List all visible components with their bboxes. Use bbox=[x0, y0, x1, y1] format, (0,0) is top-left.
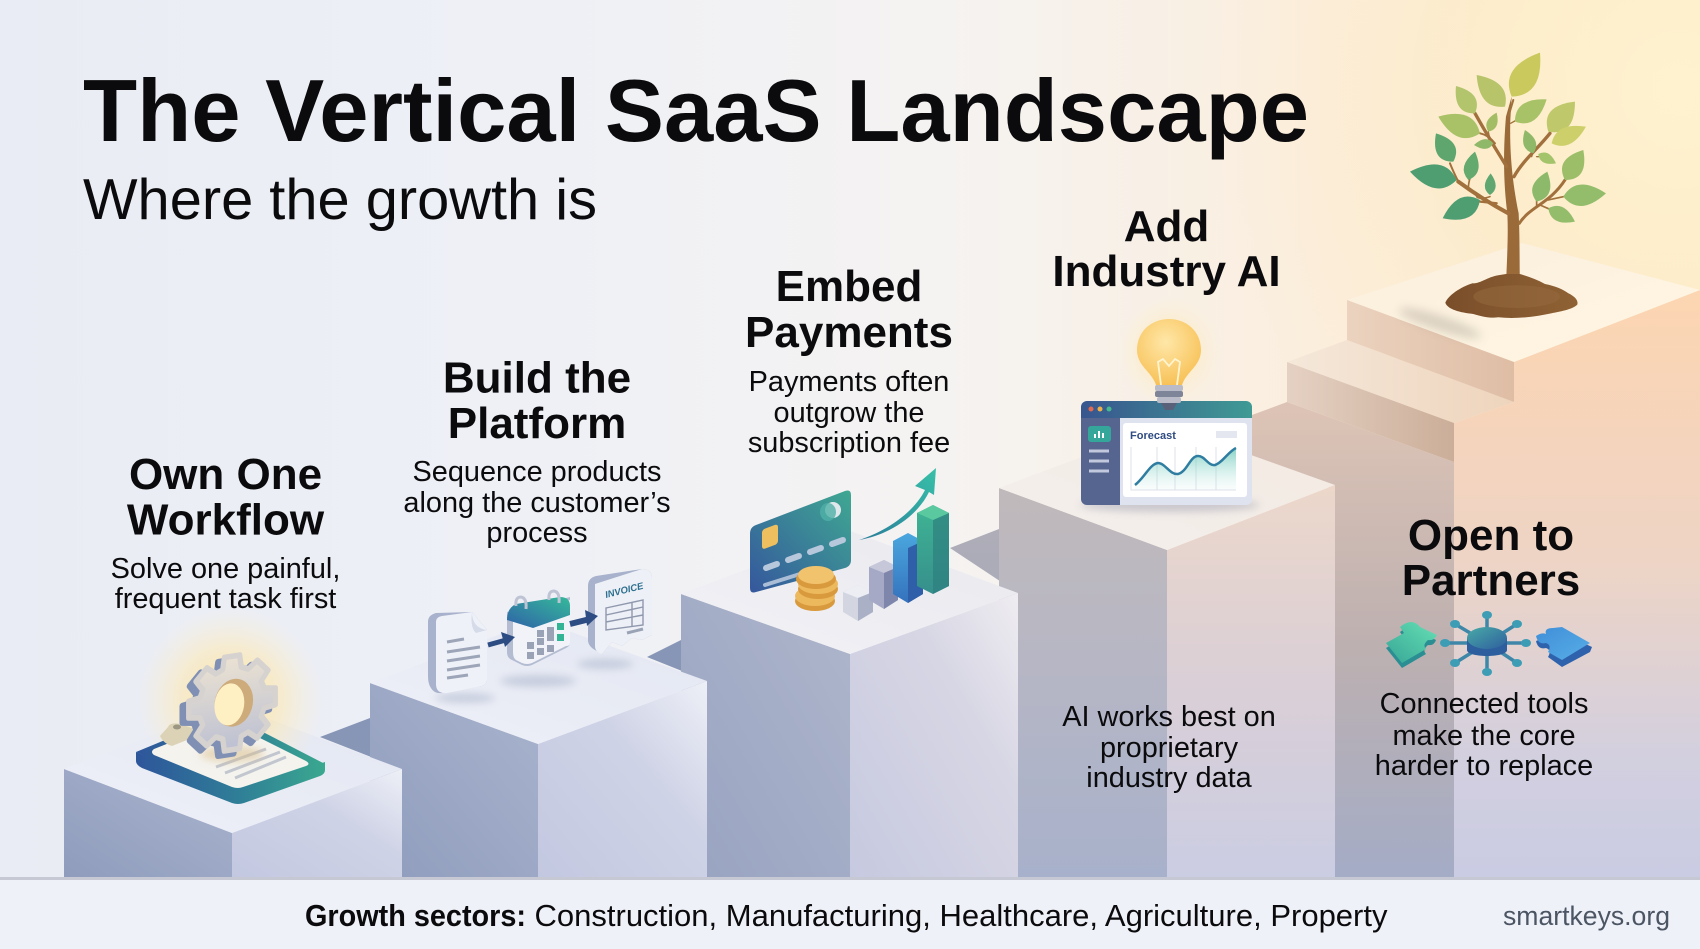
heading: build the platform bbox=[443, 354, 631, 448]
site credit: smartkeys.org bbox=[1503, 901, 1670, 931]
text: ai works best: industry data bbox=[1086, 762, 1253, 794]
text: connected tools: Connected tools bbox=[1380, 688, 1588, 720]
text: payments outgrow bbox=[748, 366, 950, 459]
heading: open to partners: Partners bbox=[1402, 556, 1580, 605]
text: sequence products: along the customer’s bbox=[403, 487, 671, 519]
text: payments outgrow: outgrow the bbox=[774, 397, 924, 429]
text: connected tools bbox=[1375, 688, 1593, 782]
text: sequence products: Sequence products bbox=[413, 456, 661, 488]
pedestal: step 2 bbox=[320, 620, 707, 877]
heading: build the platform: Build the bbox=[443, 354, 631, 402]
icon: puzzle pieces and hub bbox=[1386, 611, 1592, 676]
heading: add industry AI bbox=[1052, 202, 1281, 296]
growth sectors text: Growth sectors: bbox=[305, 898, 526, 933]
heading: embed payments: Embed bbox=[776, 262, 922, 311]
heading: embed payments: Payments bbox=[745, 308, 953, 357]
icon: lightbulb on forecast dashboard: Forecast bbox=[1130, 430, 1176, 442]
text: ai works best bbox=[1062, 701, 1276, 794]
icon: credit card coins and growth bars bbox=[750, 468, 949, 621]
footer bar bbox=[0, 877, 1700, 949]
heading: own one workflow: Own One bbox=[129, 450, 322, 499]
icon: growing tree bbox=[1397, 46, 1607, 344]
heading: own one workflow bbox=[127, 450, 325, 544]
heading: open to partners: Open to bbox=[1408, 511, 1574, 560]
heading: add industry AI: Industry AI bbox=[1052, 247, 1281, 296]
text: payments outgrow: Payments often bbox=[749, 366, 949, 398]
text: sequence products: process bbox=[486, 517, 588, 549]
panel: step 5 open to partners bbox=[1252, 46, 1700, 877]
text: ai works best: proprietary bbox=[1100, 732, 1239, 764]
text: connected tools: make the core bbox=[1392, 720, 1576, 752]
heading: add industry AI: Add bbox=[1124, 202, 1209, 251]
heading: build the platform: Platform bbox=[448, 399, 626, 448]
pedestal: step 4 bbox=[950, 425, 1335, 877]
text: solve one painful: frequent task first bbox=[115, 583, 336, 615]
heading: open to partners bbox=[1402, 511, 1580, 605]
title: The Vertical SaaS Landscape bbox=[83, 61, 1309, 160]
icon: document calendar invoice flow bbox=[428, 569, 652, 703]
panel: step 3 embed payments bbox=[647, 262, 1018, 877]
text: payments outgrow: subscription fee bbox=[748, 427, 950, 459]
pedestal: top stairs bbox=[1252, 243, 1700, 877]
text: ai works best: AI works best on bbox=[1062, 701, 1276, 733]
text: solve one painful: Solve one painful, bbox=[111, 553, 340, 585]
panel: step 2 build the platform bbox=[320, 354, 707, 877]
icon: glowing gear on document platform bbox=[136, 608, 325, 804]
text: sequence products bbox=[403, 456, 671, 549]
panel: step 4 add industry AI bbox=[950, 202, 1335, 877]
icon: document calendar invoice flow: INVOICE bbox=[604, 581, 645, 601]
pedestal: step 3 bbox=[647, 531, 1018, 877]
pedestal: step 1 bbox=[64, 705, 402, 877]
text: solve one painful bbox=[111, 553, 340, 615]
panel: step 1 own one workflow bbox=[64, 450, 402, 877]
subtitle: Where the growth is bbox=[83, 168, 597, 232]
growth sectors text: Construction, Manufacturing, Healthcare, Agriculture, Property bbox=[534, 898, 1388, 933]
icon: lightbulb on forecast dashboard bbox=[1080, 296, 1260, 512]
text: connected tools: harder to replace bbox=[1375, 750, 1593, 782]
heading: embed payments bbox=[745, 262, 953, 357]
heading: own one workflow: Workflow bbox=[127, 496, 325, 544]
